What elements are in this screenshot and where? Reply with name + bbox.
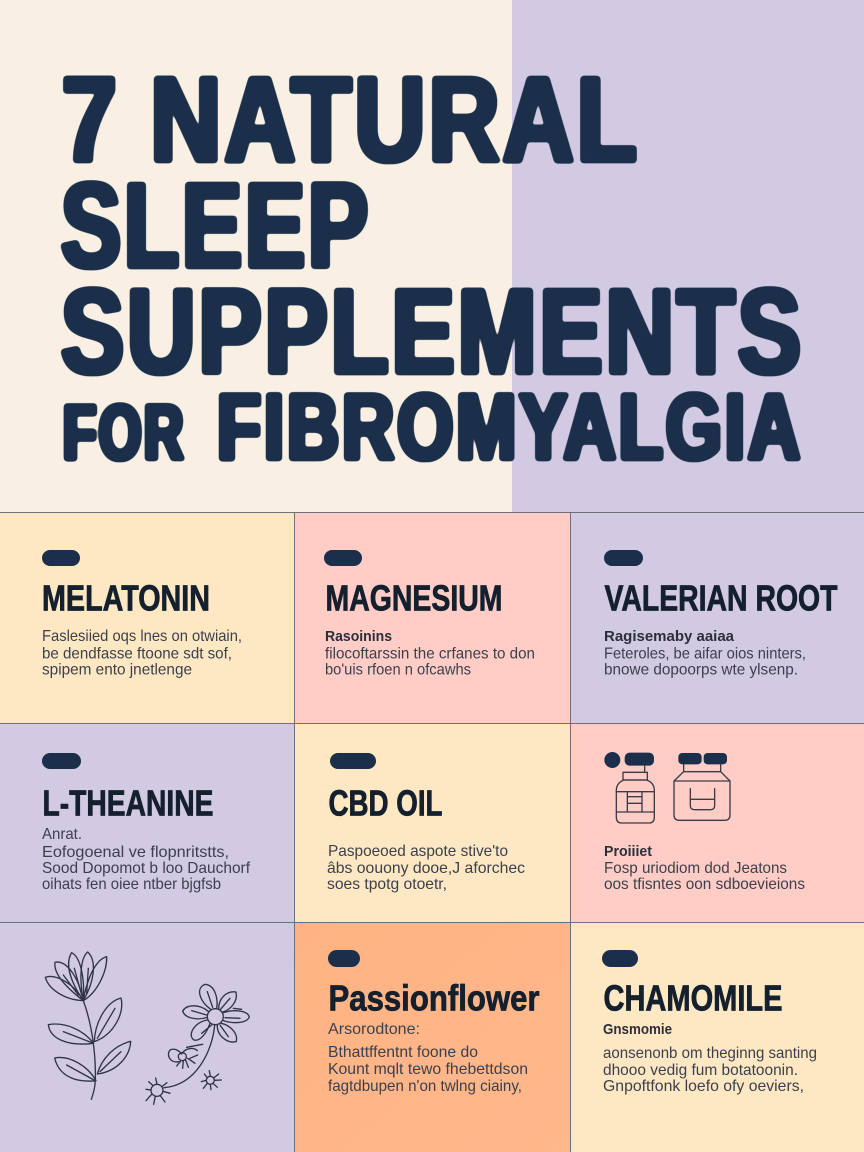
panel: product: oos tfisntes oon sdboevieions — [604, 876, 805, 893]
panel: passionflower: Arsorodtone: — [328, 1021, 420, 1038]
panel: chamomile: Gnsmomie — [603, 1021, 672, 1038]
panel: product — [570, 723, 864, 922]
panel: chamomile — [570, 922, 864, 1152]
panel: passionflower — [294, 922, 570, 1152]
icon: flowering sprig — [45, 952, 131, 1099]
panel: magnesium — [294, 512, 570, 723]
panel: chamomile: Gnpoftfonk loefo ofy oeviers, — [603, 1078, 804, 1095]
title: 7 NATURAL — [62, 51, 640, 187]
panel: magnesium: bo'uis rfoen n ofcawhs — [325, 662, 471, 678]
panel: chamomile: aonsenonb om theginng santing — [603, 1045, 817, 1062]
panel: melatonin: spipem ento jnetlenge — [42, 662, 192, 678]
panel: l-theanine: Sood Dopomot b loo Dauchorf — [42, 860, 251, 877]
panel: valerian root: Feteroles, be aifar oios ninters, — [604, 646, 806, 662]
panel: valerian root: Ragisemaby aaiaa — [604, 628, 735, 645]
panel: melatonin: MELATONIN — [42, 578, 210, 618]
panel: l-theanine: oihats fen oiee ntber bjgfsb — [42, 876, 221, 893]
panel: chamomile: CHAMOMILE — [604, 978, 782, 1018]
panel: product: Proiiiet — [604, 843, 652, 860]
panel: chamomile: dhooo vedig fum botatoonin. — [603, 1062, 798, 1079]
panel: melatonin — [0, 512, 294, 723]
panel: magnesium: Rasoinins — [325, 628, 392, 645]
panel: cbd oil: âbs oouony dooe,J aforchec — [327, 860, 525, 877]
title: FOR — [63, 388, 186, 476]
panel: l-theanine: Anrat. — [42, 826, 82, 843]
panel: melatonin: Faslesiied oqs lnes on otwiain, — [42, 628, 242, 645]
panel: l-theanine: L-THEANINE — [42, 782, 214, 824]
panel: cbd oil: Paspoeoed aspote stive'to — [328, 843, 508, 860]
panel: product: Fosp uriodiom dod Jeatons — [604, 860, 787, 877]
panel: melatonin: be dendfasse ftoone sdt sof, — [42, 646, 232, 662]
icon: supplement bottles — [604, 752, 730, 823]
panel: valerian root: bnowe dopoorps wte ylsenp. — [604, 662, 798, 678]
panel: l-theanine — [0, 723, 294, 922]
panel: magnesium: filocoftarssin the crfanes to don — [325, 646, 535, 662]
panel: botanical illustration — [0, 922, 294, 1152]
panel: passionflower: fagtdbupen n'on twlng ciainy, — [328, 1078, 522, 1095]
title — [61, 51, 804, 479]
panel: passionflower: Passionflower — [328, 978, 540, 1018]
panel: cbd oil: soes tpotg otoetr, — [327, 876, 447, 893]
panel: passionflower: Kount mqlt tewo fhebettdson — [328, 1061, 528, 1078]
panel: passionflower: Bthattffentnt foone do — [328, 1044, 478, 1061]
panel: cbd oil — [294, 723, 570, 922]
panel: valerian root — [570, 512, 864, 723]
panel: l-theanine: Eofogoenal ve flopnritstts, — [42, 844, 229, 861]
panel: cbd oil: CBD OIL — [328, 782, 442, 824]
title: SLEEP — [61, 157, 371, 293]
icon: daisy with buds — [146, 984, 249, 1104]
panel: magnesium: MAGNESIUM — [326, 578, 502, 618]
header panel — [0, 0, 864, 512]
